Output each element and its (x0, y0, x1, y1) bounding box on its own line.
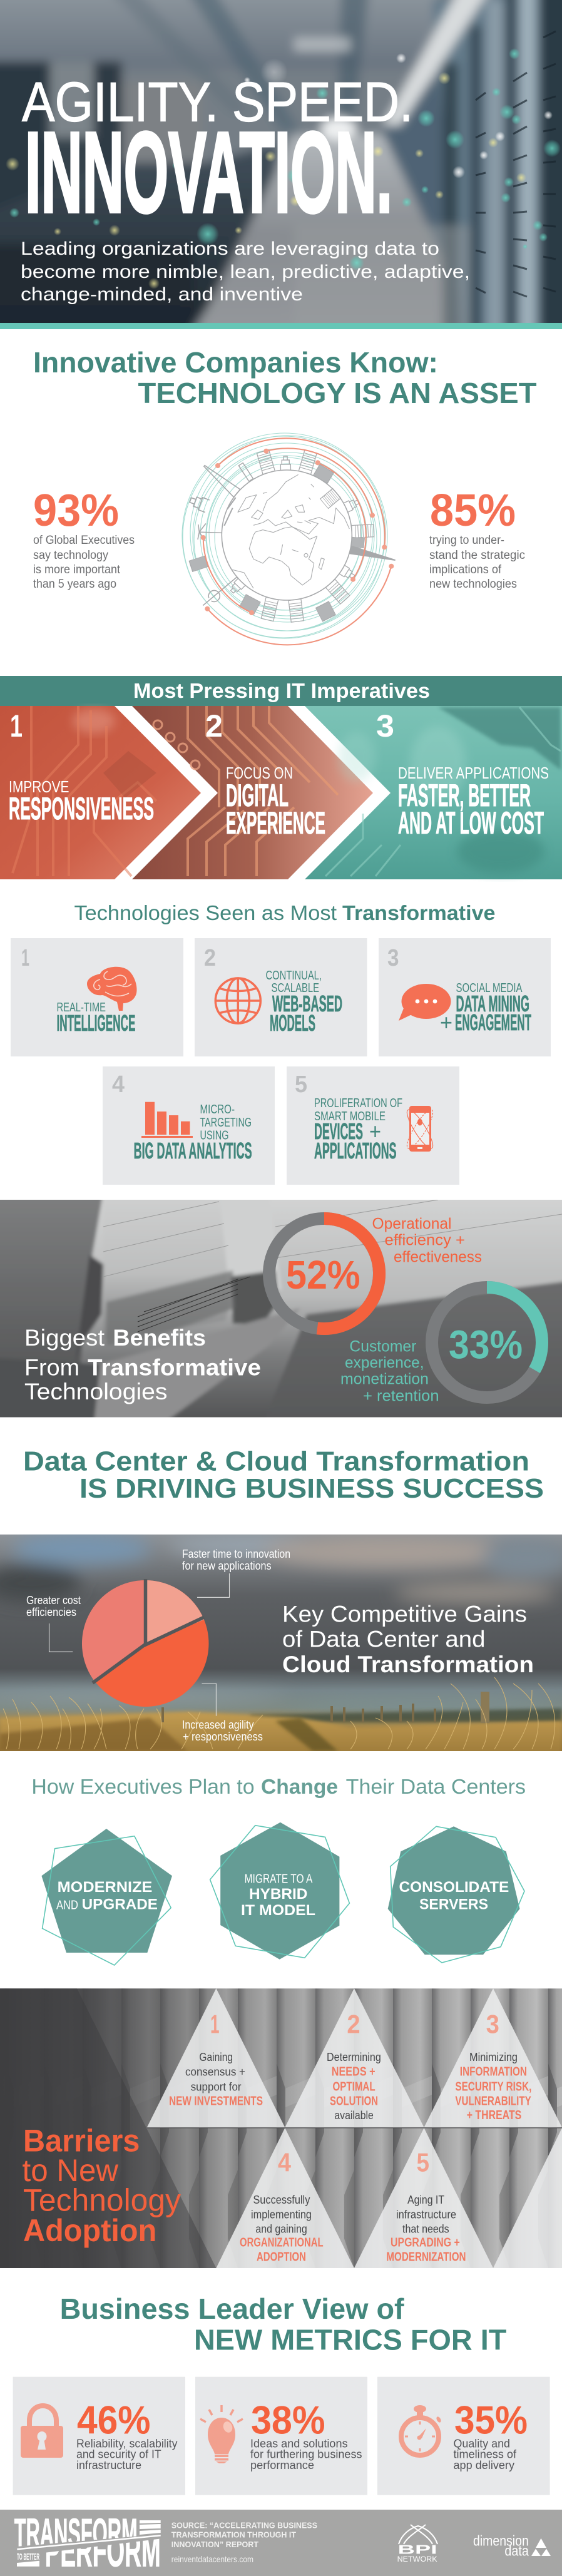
card 2: web-based models (195, 938, 367, 1056)
icon: globe (215, 978, 260, 1023)
item 3 text (376, 708, 549, 841)
barrier 2: Determining (327, 2050, 381, 2063)
panel: IT imperatives: EXPERIENCE (226, 805, 325, 841)
metric card: 35%: 35% (454, 2398, 528, 2442)
hero subtitle (21, 238, 470, 305)
band heading: Most Pressing IT Imperatives (133, 679, 430, 702)
barrier 3 (455, 2010, 531, 2122)
barrier 3: VULNERABILITY (455, 2094, 531, 2108)
shape: migrate to hybrid IT model: MIGRATE TO A (245, 1872, 313, 1886)
barrier 5: Aging IT (407, 2193, 444, 2206)
barrier 3: + THREATS (467, 2108, 521, 2122)
stat: 85%: stand the strategic (429, 549, 525, 562)
shape: migrate to hybrid IT model: HYBRID (249, 1886, 307, 1903)
barrier 2 (327, 2010, 381, 2122)
heading: technologies seen as most transformative: Transformative (342, 901, 496, 924)
heading: technologies seen as most transformative (74, 901, 496, 924)
metric card: 46%: Reliability, scalability (76, 2437, 178, 2450)
barrier 1: NEW INVESTMENTS (169, 2094, 263, 2108)
barrier 4: 4 (278, 2147, 292, 2177)
card 4: big data analytics: USING (200, 1129, 229, 1143)
shape: modernize and upgrade: UPGRADE (82, 1896, 158, 1913)
heading: technologies seen as most transformative: Technologies Seen as Most (74, 901, 337, 924)
stat: 85%: trying to under- (429, 534, 504, 547)
donut: 33% (432, 1287, 542, 1398)
metric card: 35%: app delivery (453, 2458, 515, 2471)
hero title (22, 70, 413, 237)
metric card: 35%: timeliness of (453, 2448, 517, 2461)
label: customer experience: + retention (363, 1388, 439, 1405)
barrier 2: SOLUTION (330, 2094, 378, 2108)
card 4: big data analytics: TARGETING (200, 1116, 252, 1130)
barrier 1: consensus + (185, 2065, 245, 2078)
metric card: 46%: 46% (77, 2398, 150, 2442)
label: customer experience: Customer (349, 1338, 416, 1356)
card 3: data mining and engagement: 3 (387, 945, 399, 971)
pie labels: Greater cost (26, 1594, 81, 1607)
stat: 85%: new technologies (429, 578, 517, 591)
heading: data center and cloud transformation (23, 1446, 544, 1504)
stat: 93%: than 5 years ago (33, 578, 116, 591)
label: operational efficiency: Operational (372, 1215, 452, 1233)
pie labels: efficiencies (26, 1606, 76, 1618)
hero title: AGILITY. SPEED. (22, 70, 413, 133)
pie chart (82, 1579, 209, 1707)
donut: 52%: 52% (286, 1252, 360, 1297)
barrier 1: 1 (210, 2010, 219, 2039)
shape: modernize and upgrade: AND (56, 1899, 78, 1913)
metric card: 35% (377, 2377, 550, 2495)
card 5: mobile devices and applications: 5 (295, 1071, 307, 1098)
label: operational efficiency (372, 1215, 482, 1266)
metric card: 46%: and security of IT (76, 2448, 161, 2461)
heading: technology is an asset: TECHNOLOGY IS AN ASSET (138, 377, 537, 409)
stat: 85%: 85% (430, 486, 516, 536)
label: customer experience: experience, (345, 1354, 424, 1372)
metric card: 46% (13, 2377, 185, 2495)
panel title: Transformative (88, 1354, 261, 1381)
panel title: Cloud Transformation (282, 1652, 534, 1677)
heading: technology is an asset: Innovative Companies Know: (33, 346, 438, 379)
heading: new metrics for IT: Business Leader View of (60, 2292, 404, 2325)
shape: migrate to hybrid IT model (210, 1822, 349, 1960)
panel title (282, 1602, 534, 1677)
donut: 52% (269, 1219, 379, 1329)
orbit rings (182, 433, 387, 638)
item 1 text: 1 (10, 708, 23, 744)
logo: transform to better perform (14, 2518, 161, 2567)
card 2: web-based models: CONTINUAL, (265, 969, 322, 983)
panel title: Technology (23, 2183, 181, 2218)
stat: 93% (33, 486, 135, 591)
card 4: big data analytics: BIG DATA ANALYTICS (134, 1138, 252, 1163)
metric card: 46%: infrastructure (76, 2458, 141, 2471)
item 2 text (205, 708, 325, 841)
metric card: 38%: for furthering business (250, 2448, 362, 2461)
card 4: big data analytics: MICRO- (200, 1103, 235, 1117)
item 2 text: 2 (205, 708, 223, 744)
panel title: Barriers (23, 2123, 140, 2158)
barrier 5: that needs (402, 2222, 449, 2235)
panel title: of Data Center and (282, 1627, 486, 1652)
panel title (24, 1325, 261, 1404)
item 2 text: FOCUS ON (226, 764, 293, 782)
barrier 4: ADOPTION (257, 2251, 306, 2264)
heading: how executives plan to change: Change (261, 1775, 338, 1798)
barrier 5: UPGRADING + (391, 2236, 460, 2249)
barrier 5 (386, 2147, 466, 2264)
panel: competitive gains (0, 1533, 562, 1759)
item 2 text: DIGITAL (226, 778, 289, 813)
panel title: From (24, 1354, 79, 1381)
label: operational efficiency: effectiveness (394, 1249, 482, 1266)
shape: modernize and upgrade: MODERNIZE (58, 1879, 152, 1896)
shape: consolidate servers: SERVERS (419, 1896, 488, 1913)
architecture photo (0, 1192, 562, 1424)
barrier 3: Minimizing (469, 2050, 518, 2063)
source text: reinventdatacenters.com (171, 2554, 253, 2564)
chevron 1 background (0, 706, 201, 879)
icon: speech bubble (399, 984, 451, 1021)
barrier 2: 2 (347, 2010, 360, 2039)
pie labels: for new applications (182, 1560, 272, 1572)
source text: TRANSFORMATION THROUGH IT (171, 2530, 296, 2540)
panel: hero (0, 0, 562, 337)
stat: 85%: implications of (429, 563, 502, 576)
panel: biggest benefits (0, 1192, 562, 1424)
logo: dimension data (473, 2533, 551, 2558)
label: customer experience (340, 1338, 439, 1405)
label: customer experience: monetization (340, 1371, 429, 1388)
logo: BPI network (397, 2525, 437, 2563)
hero photo: blurred server room (0, 0, 562, 337)
triangles (147, 1988, 562, 2268)
hero subtitle: change-minded, and inventive (21, 284, 303, 305)
panel title: Biggest (24, 1325, 105, 1351)
pie labels: Increased agility (182, 1719, 254, 1731)
card 3: data mining and engagement (379, 938, 551, 1056)
barrier 5: MODERNIZATION (386, 2251, 466, 2264)
panel title: to New (23, 2153, 119, 2188)
hero subtitle: become more nimble, lean, predictive, adaptive, (21, 262, 470, 282)
metric card: 38%: performance (250, 2458, 314, 2471)
shape: consolidate servers (388, 1826, 524, 1963)
card 2: web-based models: 2 (204, 945, 216, 971)
barrier 4: Successfully (253, 2193, 310, 2206)
icon: stopwatch (401, 2405, 442, 2455)
chevron 2 background (132, 706, 373, 879)
hero subtitle: Leading organizations are leveraging data to (21, 238, 439, 259)
card 2: web-based models: MODELS (270, 1010, 315, 1036)
barrier 5: infrastructure (396, 2207, 456, 2221)
card 3: data mining and engagement: SOCIAL MEDIA (456, 981, 523, 995)
shape: migrate to hybrid IT model: IT MODEL (241, 1902, 315, 1919)
globe outline (222, 470, 352, 600)
metric card: 38%: 38% (251, 2398, 325, 2442)
stat: 93%: is more important (33, 563, 121, 576)
card 2: web-based models: WEB-BASED (272, 991, 342, 1016)
metric card: 38% (195, 2377, 367, 2495)
panel title: Benefits (113, 1325, 206, 1351)
logo: dimension data: data (504, 2542, 529, 2558)
footer (0, 2510, 562, 2576)
label: operational efficiency: efficiency + (384, 1232, 465, 1249)
panel title: Adoption (23, 2213, 156, 2248)
barrier 2: OPTIMAL (333, 2080, 376, 2094)
barrier 3: 3 (486, 2010, 499, 2039)
icon: brain (87, 967, 137, 1011)
card 4: big data analytics: 4 (112, 1071, 125, 1098)
card 5: mobile devices and applications: SMART MOBILE (314, 1110, 386, 1123)
chevron 3 background (305, 706, 562, 879)
card 5: mobile devices and applications (287, 1066, 459, 1185)
stat: 85% (429, 486, 525, 591)
panel: IT imperatives (0, 676, 562, 879)
barrier 1: Gaining (199, 2050, 233, 2063)
source text: SOURCE: “ACCELERATING BUSINESS (171, 2520, 317, 2530)
item 1 text: IMPROVE (9, 777, 69, 796)
logo: dimension data: dimension (473, 2533, 529, 2549)
logo: BPI network: NETWORK (397, 2555, 437, 2563)
item 3 text: 3 (376, 708, 394, 744)
landmark buildings (188, 450, 396, 622)
server rack light dashes (476, 31, 556, 297)
pie labels: + responsiveness (183, 1730, 263, 1743)
heading: new metrics for IT (60, 2292, 506, 2356)
panel title: Technologies (24, 1379, 168, 1404)
card 5: mobile devices and applications: PROLIFERATION OF (314, 1096, 402, 1110)
barrier 5: 5 (417, 2147, 429, 2177)
pie labels: Faster time to innovation (182, 1548, 290, 1560)
card 1: real-time intelligence: REAL-TIME (56, 1001, 106, 1015)
illustration: globe with landmarks and orbit rings (182, 433, 396, 645)
barrier 1: support for (191, 2080, 242, 2093)
barrier 3: INFORMATION (460, 2065, 527, 2079)
barrier 4: ORGANIZATIONAL (240, 2236, 324, 2249)
icon: bar chart (141, 1102, 193, 1138)
barrier 3: SECURITY RISK, (455, 2080, 531, 2094)
heading: new metrics for IT: NEW METRICS FOR IT (194, 2323, 506, 2356)
icon: smartphone with orbits (403, 1106, 437, 1152)
logo: transform to better perform: PERFORM (45, 2527, 161, 2576)
source text: INNOVATION” REPORT (171, 2540, 258, 2549)
source text (171, 2520, 317, 2564)
heading: how executives plan to change (31, 1775, 526, 1798)
heading: how executives plan to change: How Executives Plan to (31, 1775, 255, 1798)
shape: consolidate servers: CONSOLIDATE (399, 1879, 509, 1896)
glowing lights (6, 48, 561, 289)
barrier 2: available (334, 2108, 374, 2122)
barrier 1 (169, 2010, 263, 2108)
logo: transform to better perform: TO BETTER (17, 2552, 39, 2562)
heading: data center and cloud transformation: Data Center & Cloud Transformation (23, 1446, 529, 1477)
card 3: data mining and engagement: + (440, 1009, 452, 1035)
item 1 text: RESPONSIVENESS (9, 791, 154, 826)
card 4: big data analytics (103, 1066, 275, 1185)
pie labels (26, 1548, 290, 1743)
heading: data center and cloud transformation: IS DRIVING BUSINESS SUCCESS (79, 1473, 544, 1504)
card 2: web-based models: SCALABLE (272, 981, 319, 995)
metric card: 38%: Ideas and solutions (250, 2437, 348, 2450)
barrier 4: and gaining (255, 2222, 307, 2235)
barrier 4: implementing (251, 2207, 312, 2221)
icon: padlock (21, 2406, 63, 2458)
card 5: mobile devices and applications: + (369, 1118, 381, 1144)
card 1: real-time intelligence: 1 (21, 945, 29, 971)
band heading (0, 676, 562, 706)
panel title (23, 2123, 181, 2248)
barrier 2: NEEDS + (332, 2065, 376, 2079)
stat: 93%: 93% (33, 486, 119, 536)
panel title: Key Competitive Gains (282, 1602, 527, 1627)
landscape photo (0, 1533, 562, 1759)
barrier 4 (240, 2147, 324, 2264)
shape: modernize and upgrade (41, 1829, 172, 1965)
stat: 93%: of Global Executives (33, 534, 135, 547)
card 5: mobile devices and applications: APPLICATIONS (314, 1138, 397, 1163)
panel: barriers to adoption (0, 1988, 562, 2268)
donut: 33%: 33% (449, 1322, 523, 1367)
leader lines (49, 1573, 229, 1716)
card 5: mobile devices and applications: DEVICES (314, 1118, 363, 1144)
logo: BPI network: BPI (398, 2543, 437, 2557)
logo: transform to better perform: TRANSFORM (14, 2510, 138, 2555)
metal texture photo (0, 1988, 562, 2268)
icon: light bulb (200, 2405, 243, 2463)
teal band (0, 323, 562, 329)
heading: how executives plan to change: Their Data Centers (346, 1775, 526, 1798)
item 1 text (9, 708, 154, 826)
coral orbit arcs (203, 438, 391, 645)
card 1: real-time intelligence: INTELLIGENCE (56, 1010, 135, 1036)
card 1: real-time intelligence (11, 938, 183, 1056)
continents map (224, 474, 349, 588)
stat: 93%: say technology (33, 549, 108, 562)
heading: technology is an asset (33, 346, 537, 409)
metric card: 35%: Quality and (453, 2437, 510, 2450)
